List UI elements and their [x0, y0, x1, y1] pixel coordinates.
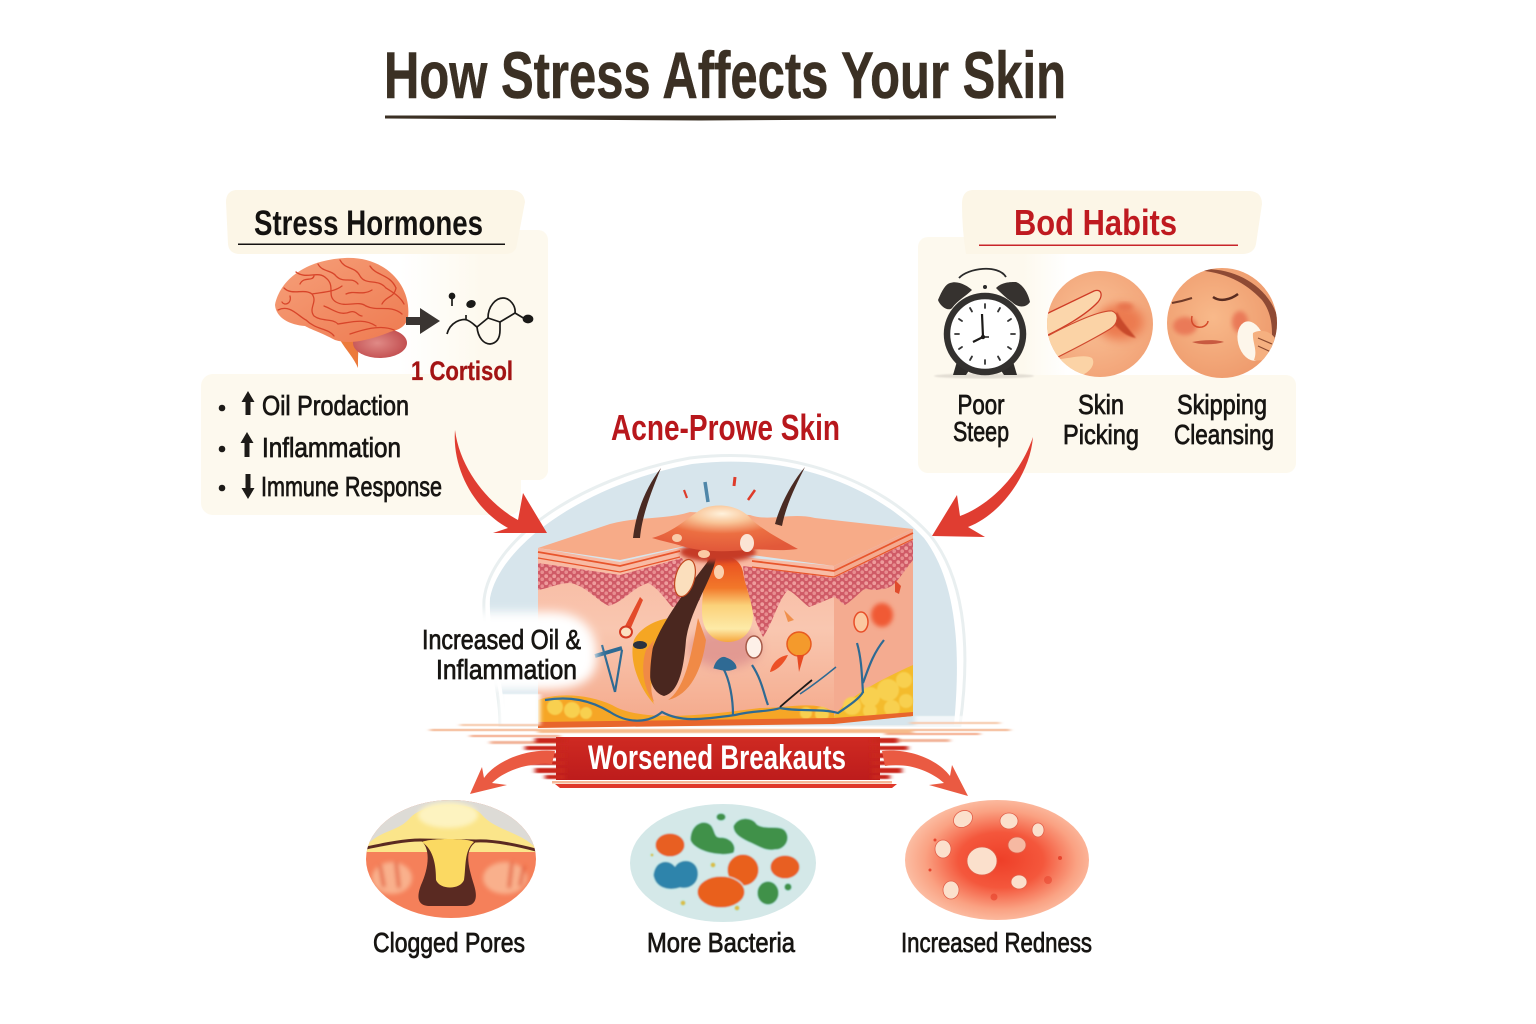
heading: stress hormones: Stress Hormones [254, 204, 483, 243]
ground streaks [430, 694, 1010, 744]
list item: inflammation: Inflammation [262, 432, 401, 463]
label: skipping cleansing: Skipping [1177, 389, 1267, 420]
result: clogged pores [360, 795, 540, 958]
heading: acne-prone skin: Acne-Prowe Skin [611, 407, 840, 448]
banner: worsened breakouts [430, 694, 1010, 788]
blood vessels [545, 640, 884, 721]
dermis band left [538, 558, 700, 607]
front face [538, 548, 834, 727]
label: poor sleep: Poor [958, 389, 1004, 420]
epidermis lines [538, 533, 913, 577]
pimple sac [702, 555, 753, 642]
label: more bacteria: More Bacteria [647, 927, 795, 958]
arrow: to clogged pores [470, 751, 555, 794]
label: skipping cleansing: Cleansing [1174, 419, 1274, 450]
banner body [520, 737, 910, 788]
dark vein [780, 680, 812, 707]
icon: skipping cleansing [1167, 268, 1280, 378]
pustules [671, 534, 762, 658]
label: skin picking [1063, 389, 1139, 450]
right face [834, 529, 913, 723]
skin cross-section [538, 467, 913, 728]
top surface [538, 512, 913, 566]
inflamed tissue around sac [689, 628, 761, 668]
label: skin picking: Picking [1063, 419, 1139, 450]
list item: immune response: Immune Response [261, 471, 442, 502]
icon: clogged pore [360, 795, 540, 918]
label: increased oil and inflammation: Increased Oil & [422, 624, 581, 655]
label: poor sleep [953, 389, 1009, 447]
dermis band right [743, 540, 913, 637]
label: skipping cleansing [1174, 389, 1274, 450]
small lesions [620, 580, 901, 672]
list item: inflammation [219, 432, 401, 463]
inflammation ticks [684, 477, 755, 502]
icon: bacteria [630, 804, 816, 922]
banner: worsened breakouts: Worsened Breakauts [588, 739, 846, 777]
icon: alarm clock [934, 269, 1034, 378]
hairs [633, 467, 805, 538]
label: increased oil and inflammation [422, 612, 597, 690]
label: increased redness: Increased Redness [901, 927, 1092, 958]
label: increased oil and inflammation: Inflammation [436, 654, 577, 685]
inflamed base of bump [680, 542, 756, 562]
label: clogged pores: Clogged Pores [373, 927, 525, 958]
label: poor sleep: Steep [953, 416, 1009, 447]
fat layer [538, 618, 913, 728]
panel background [918, 190, 1296, 473]
result: more bacteria [630, 804, 816, 958]
icon: red inflamed skin [905, 800, 1089, 920]
follicle [643, 556, 716, 702]
list item: immune response [219, 471, 442, 502]
icon: brain [275, 258, 408, 368]
panel: bad habits [918, 190, 1296, 473]
panel background [201, 190, 548, 515]
list item: oil production [219, 390, 409, 421]
bump [652, 505, 798, 551]
result: increased redness [901, 800, 1092, 958]
arrow: habits to skin [932, 437, 1033, 537]
label: skin picking: Skin [1078, 389, 1124, 420]
panel: stress hormones [201, 190, 548, 515]
icon: skin picking [1042, 271, 1153, 377]
labels: bad habits [953, 389, 1274, 450]
arrow: to increased redness [882, 751, 968, 796]
arrow: hormones to skin [455, 430, 547, 533]
label: cortisol: 1 Cortisol [411, 356, 513, 386]
list item: oil production: Oil Prodaction [262, 390, 409, 421]
arrow: brain to cortisol [406, 308, 440, 334]
title [384, 38, 1066, 120]
title: How Stress Affects Your Skin [384, 38, 1066, 112]
heading: bad habits: Bod Habits [1014, 202, 1177, 243]
icon: cortisol molecule [447, 294, 532, 344]
list: hormone effects [219, 390, 442, 502]
oil spot [633, 641, 647, 649]
background dome [484, 456, 965, 725]
